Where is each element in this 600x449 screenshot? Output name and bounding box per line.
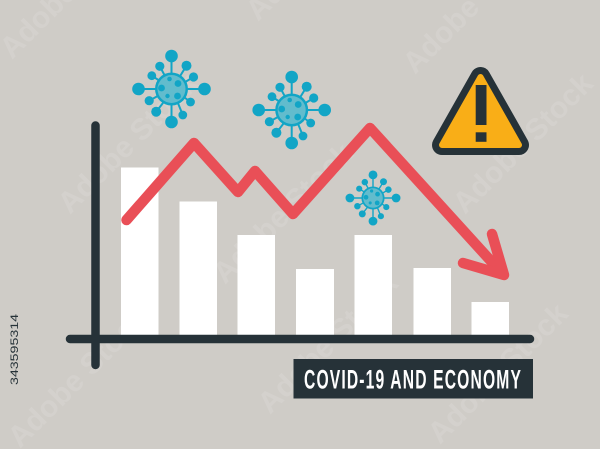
arrow: falling red trend line bbox=[126, 128, 504, 275]
chart axes bbox=[70, 126, 530, 365]
stock watermarks: Adobe Stock bbox=[252, 267, 405, 420]
stock watermarks: Adobe Stock bbox=[207, 137, 360, 290]
stock watermarks: Adobe Stock bbox=[422, 297, 575, 449]
title label: COVID-19 AND ECONOMY bbox=[304, 364, 521, 395]
stock id text: 343595314 bbox=[9, 314, 21, 385]
icon: virus left bbox=[132, 50, 211, 128]
stock watermarks: Adobe Stock bbox=[52, 67, 205, 220]
bar chart bbox=[121, 168, 509, 335]
icon: virus middle bbox=[252, 71, 331, 149]
icon: warning triangle bbox=[442, 77, 519, 145]
icon: virus small bbox=[345, 170, 401, 226]
stock watermarks: Adobe Stock bbox=[447, 67, 600, 220]
